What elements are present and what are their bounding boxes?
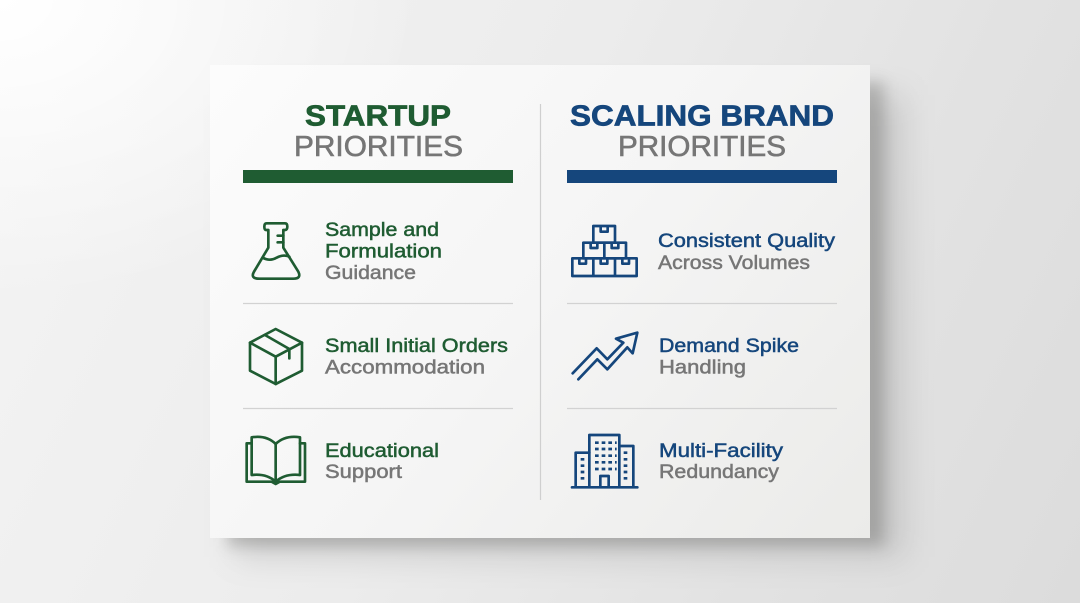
item: sample and formulation guidance bbox=[325, 219, 442, 284]
icon: open book bbox=[247, 437, 305, 484]
item: consistent quality across volumes: Across Volumes bbox=[658, 252, 810, 274]
subheading: priorities: PRIORITIES bbox=[294, 131, 463, 163]
item: small initial orders accommodation: Accommodation bbox=[325, 356, 485, 378]
item: consistent quality across volumes: Consistent Quality bbox=[658, 230, 835, 252]
icon: rising arrow bbox=[573, 333, 637, 379]
item: small initial orders accommodation bbox=[325, 335, 508, 378]
subheading: priorities: PRIORITIES bbox=[618, 131, 786, 163]
heading: scaling brand: SCALING BRAND bbox=[570, 100, 834, 132]
item: small initial orders accommodation: Small Initial Orders bbox=[325, 335, 508, 357]
item: demand spike handling bbox=[659, 335, 799, 378]
item: multi-facility redundancy: Multi-Facility bbox=[659, 440, 783, 462]
icon: office buildings bbox=[572, 435, 637, 487]
heading: startup: STARTUP bbox=[305, 100, 451, 132]
item: demand spike handling: Demand Spike bbox=[659, 335, 799, 357]
item: sample and formulation guidance: Sample and bbox=[325, 219, 439, 241]
icon: stacked boxes bbox=[572, 226, 637, 276]
panel: scaling brand priorities bbox=[567, 100, 837, 487]
blue header bar bbox=[567, 170, 837, 183]
item: educational support: Educational bbox=[325, 440, 439, 462]
icon: flask bbox=[253, 223, 299, 279]
icon: box bbox=[250, 329, 302, 384]
item: multi-facility redundancy bbox=[659, 440, 783, 483]
item: multi-facility redundancy: Redundancy bbox=[659, 461, 779, 483]
green header bar bbox=[243, 170, 513, 183]
item: sample and formulation guidance: Formulation bbox=[325, 240, 442, 262]
item: educational support bbox=[325, 440, 439, 483]
item: sample and formulation guidance: Guidance bbox=[325, 262, 416, 284]
card soft shadow bbox=[235, 95, 903, 557]
item: consistent quality across volumes bbox=[658, 230, 835, 274]
panel: startup priorities bbox=[243, 100, 513, 484]
card panel bbox=[210, 65, 870, 538]
card edge shadow bbox=[228, 82, 884, 546]
item: educational support: Support bbox=[325, 461, 403, 483]
item: demand spike handling: Handling bbox=[659, 356, 746, 378]
